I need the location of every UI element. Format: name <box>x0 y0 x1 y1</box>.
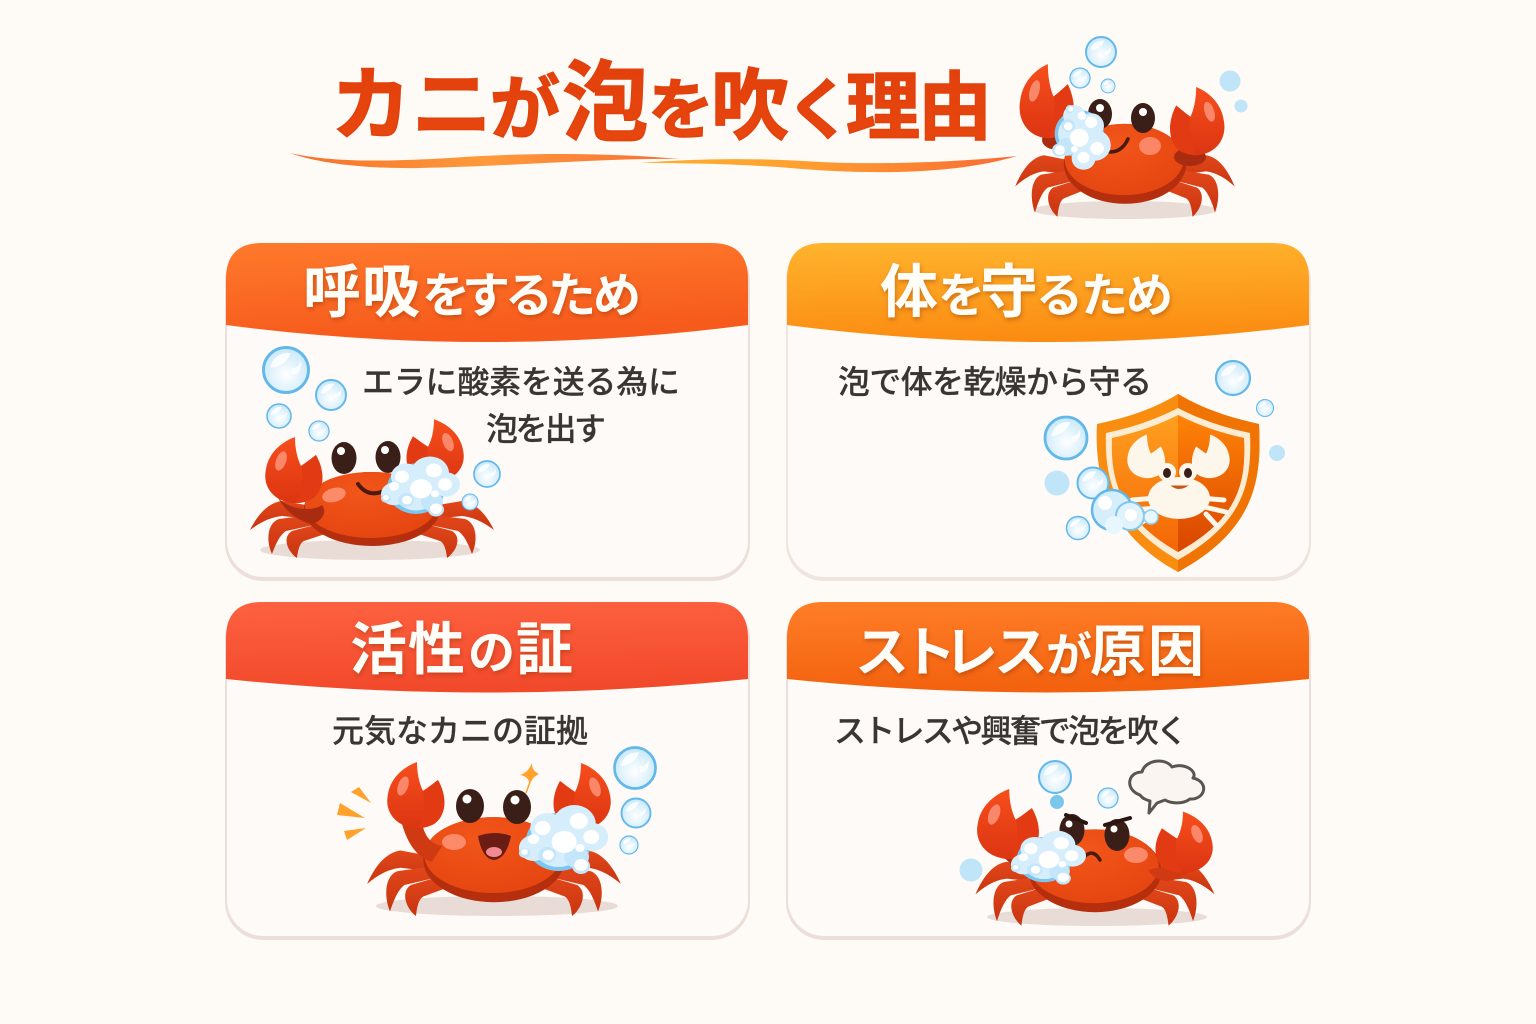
heading: ト <box>902 623 956 683</box>
panel: ストレスが原因 <box>786 602 1311 940</box>
title crab with bubbles <box>1015 37 1248 219</box>
heading: 証 <box>516 618 573 682</box>
shield with crab <box>1097 394 1260 572</box>
panel header <box>787 602 1309 692</box>
panel header <box>226 602 748 692</box>
heading: 性 <box>408 618 465 682</box>
heading: る <box>1036 269 1083 322</box>
heading: 呼 <box>303 260 361 325</box>
crab with foam <box>367 762 621 916</box>
body text: ストレスや興奮で泡を吹く <box>834 713 1188 749</box>
panel header <box>226 243 748 342</box>
heading: る <box>505 270 553 323</box>
panel: 呼吸をするため <box>225 243 750 581</box>
heading: を <box>422 270 470 323</box>
heading: 吸 <box>362 260 420 325</box>
heading: 守 <box>980 260 1038 325</box>
panel header <box>787 243 1309 342</box>
foam and bubbles <box>1044 361 1285 540</box>
body text: 元気なカニの証拠 <box>332 713 588 749</box>
title: カ <box>331 61 411 150</box>
title: 理 <box>846 66 920 149</box>
excitement marks <box>337 763 539 840</box>
heading: 因 <box>1148 620 1204 683</box>
body text: 泡で体を乾燥から守る <box>838 364 1152 400</box>
heading: た <box>1081 269 1128 322</box>
panel: 活性の証 <box>225 602 750 940</box>
title: を <box>648 73 714 147</box>
heading: 活 <box>350 618 407 682</box>
title: 由 <box>918 66 992 149</box>
white crab emblem <box>1127 434 1230 526</box>
heading: を <box>938 269 985 322</box>
title: 吹 <box>711 62 789 150</box>
title underline swoosh <box>290 153 1017 172</box>
angry crab with foam <box>975 789 1215 926</box>
heading: が <box>1046 629 1092 681</box>
body text line 2: 泡を出す <box>486 411 606 447</box>
title: 泡 <box>562 55 649 152</box>
bubbles <box>264 348 500 510</box>
title: ニ <box>412 61 492 150</box>
crab with foam <box>250 419 494 560</box>
title: が <box>490 70 560 148</box>
panel: 体を守るため <box>786 243 1311 581</box>
bubbles <box>960 761 1118 882</box>
heading: ス <box>855 623 909 683</box>
body text: エラに酸素を送る為に <box>362 364 680 400</box>
speech cloud <box>1130 761 1204 813</box>
heading: た <box>548 270 596 323</box>
heading: 体 <box>880 260 938 325</box>
title: く <box>786 73 852 147</box>
heading: の <box>468 626 515 679</box>
heading: レ <box>944 623 998 683</box>
heading: め <box>1126 269 1173 322</box>
bubbles <box>614 748 656 854</box>
heading: 原 <box>1090 620 1146 683</box>
heading: ス <box>994 623 1048 683</box>
heading: め <box>593 270 641 323</box>
heading: す <box>462 270 510 323</box>
